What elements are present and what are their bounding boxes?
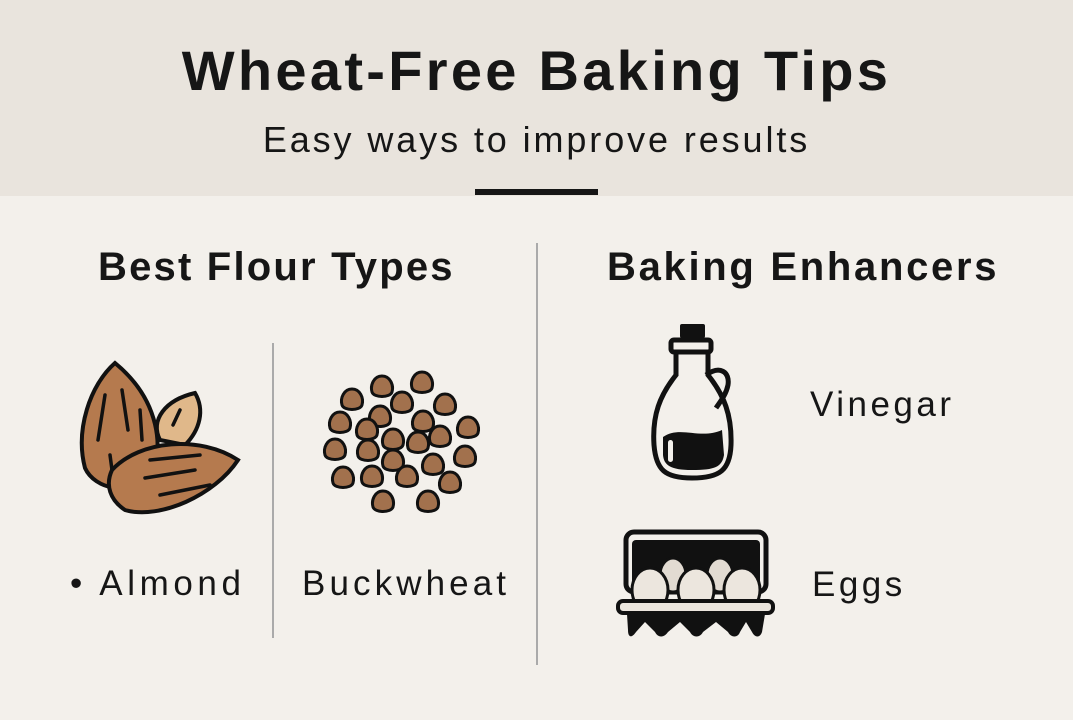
icon: almonds [80, 360, 241, 514]
sub divider [272, 343, 274, 638]
header band [0, 0, 1073, 196]
label buckwheat: Buckwheat [302, 564, 510, 603]
panel: flour types [70, 245, 510, 638]
label almond: • Almond [70, 564, 246, 603]
icon: vinegar bottle [651, 324, 734, 480]
heading enhancers: Baking Enhancers [607, 245, 999, 289]
icon: buckwheat seeds [322, 370, 480, 513]
icon: egg carton [616, 530, 775, 636]
subtitle: Easy ways to improve results [263, 119, 810, 160]
label eggs: Eggs [812, 565, 906, 604]
label vinegar: Vinegar [810, 385, 955, 424]
panel: enhancers [607, 245, 999, 604]
title: Wheat-Free Baking Tips [182, 39, 891, 102]
divider main [536, 243, 538, 665]
heading flour: Best Flour Types [98, 245, 455, 289]
underline accent [475, 189, 598, 195]
